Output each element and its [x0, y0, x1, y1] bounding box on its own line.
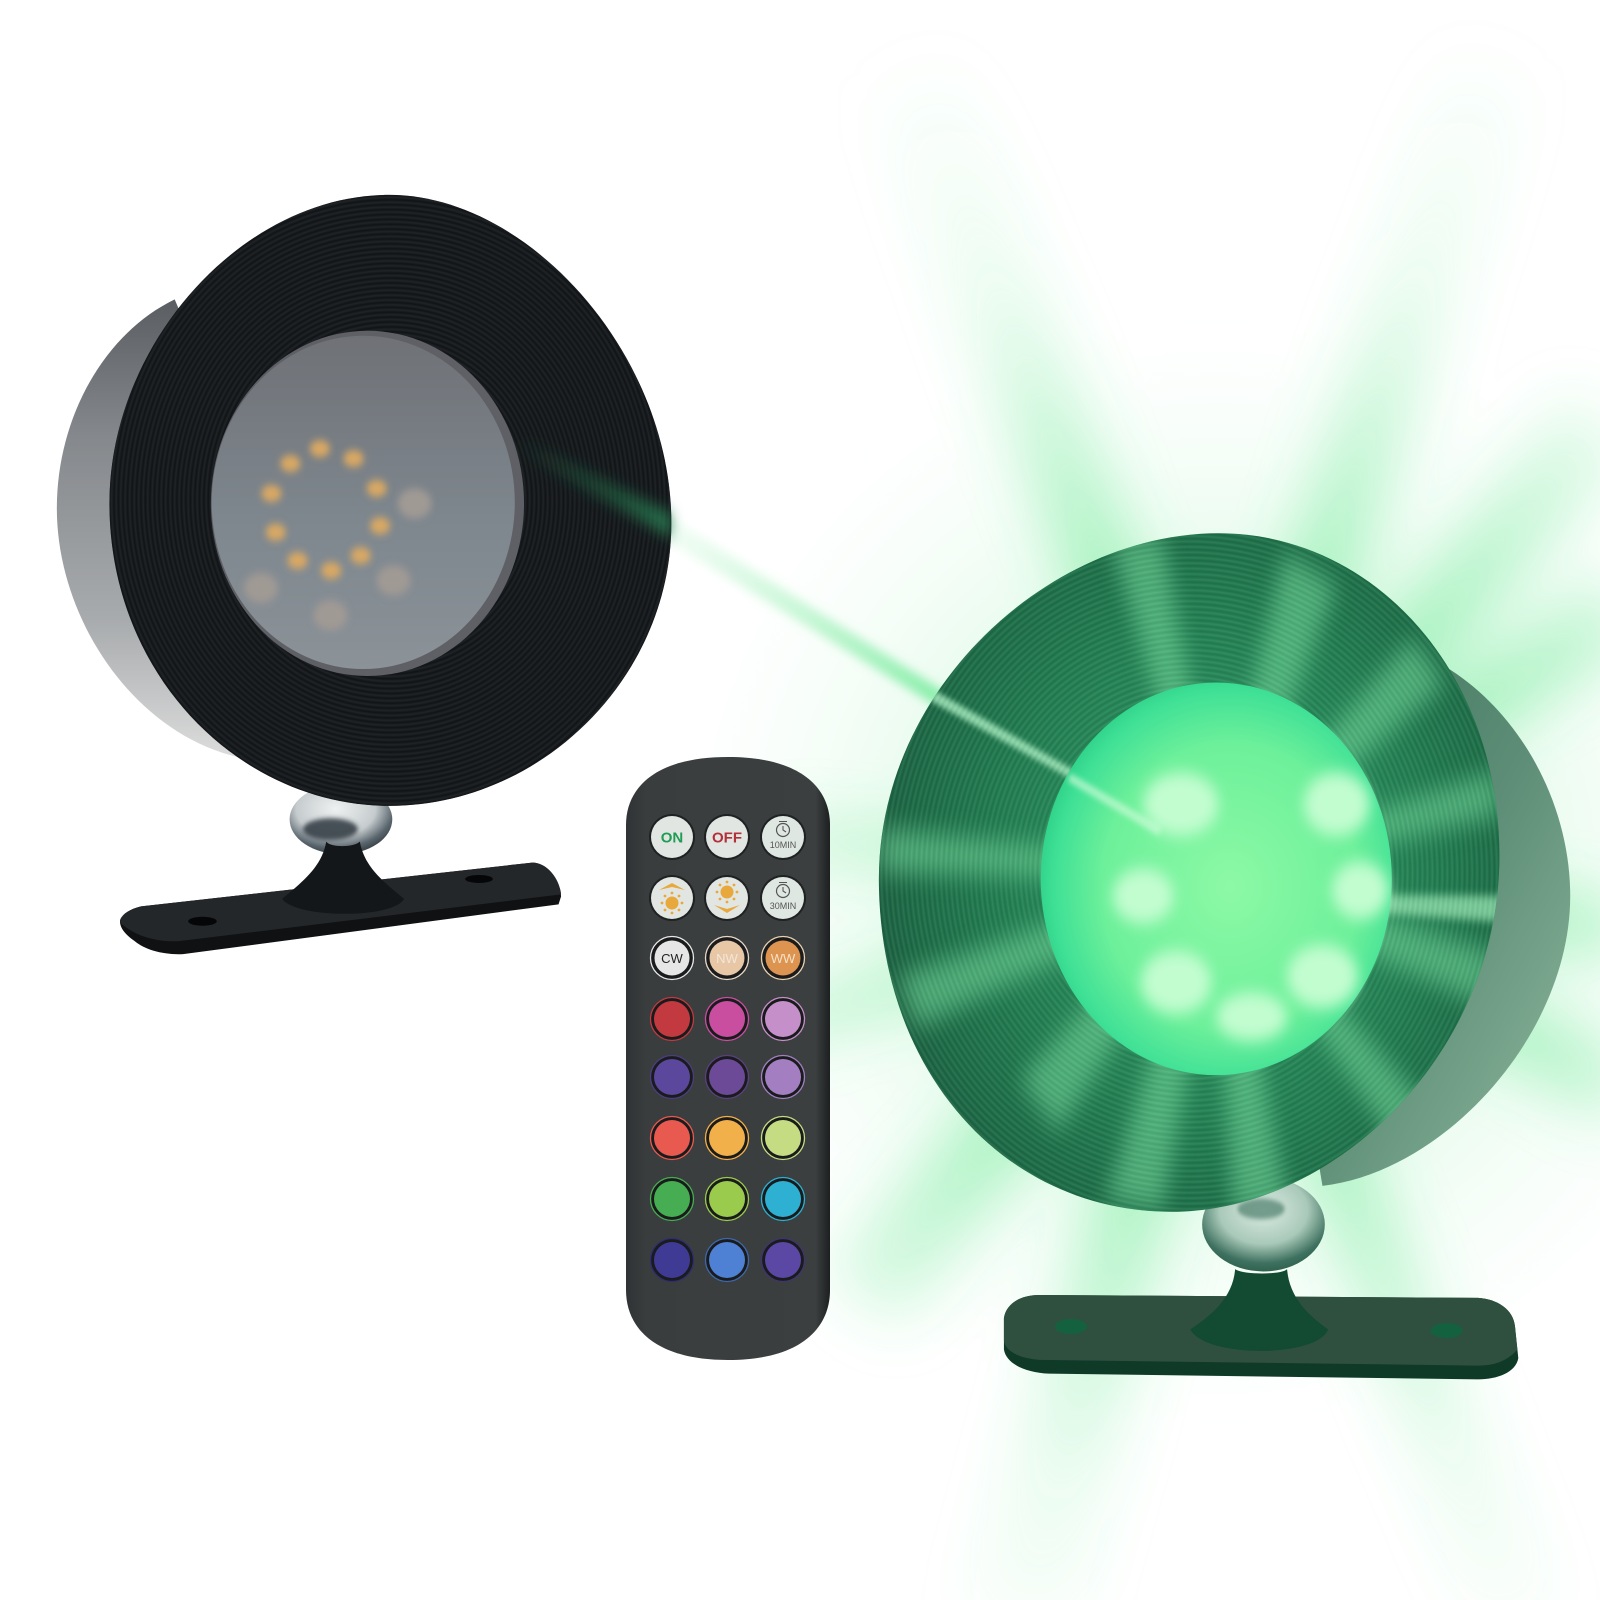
right lamp body: [1285, 666, 1570, 1186]
button: 30 minute timer: [760, 875, 806, 921]
button: OFF: [704, 814, 750, 860]
left lamp stem: [282, 842, 404, 914]
right lamp ball joint: [1202, 1177, 1325, 1271]
button: NW: [706, 936, 748, 980]
left lamp ball joint: [290, 784, 392, 854]
button: WW: [762, 936, 804, 980]
button: WW: WW: [771, 951, 796, 966]
right lamp mounting plate: [1004, 1295, 1518, 1379]
button: 10 minute timer: [760, 814, 806, 860]
colour buttons: [650, 998, 804, 1282]
remote body: [626, 757, 830, 1360]
button: NW: NW: [716, 951, 739, 966]
left lamp mounting plate: [120, 863, 561, 954]
button: 30 minute timer: 30MIN: [770, 901, 796, 911]
green light rays: [659, 0, 1600, 1600]
button: 10 minute timer: 10MIN: [770, 840, 796, 850]
left lamp: [57, 195, 671, 954]
button: CW: [650, 936, 694, 980]
button: ON: [649, 814, 695, 860]
right lamp lens: [1041, 683, 1392, 1075]
remote control: [626, 757, 830, 1360]
button: brightness up: [649, 875, 695, 921]
button: OFF: OFF: [712, 830, 742, 846]
green beam across left lamp: [516, 434, 671, 538]
right lamp: [879, 533, 1570, 1379]
left lamp body: [57, 299, 293, 757]
right lamp face ring: [879, 533, 1502, 1212]
right lamp stem: [1190, 1269, 1328, 1351]
left lamp face ring: [109, 195, 671, 806]
left lamp lens: [211, 331, 524, 676]
button: ON: ON: [661, 830, 683, 846]
button: CW: CW: [661, 951, 684, 966]
button: brightness down: [704, 875, 750, 921]
